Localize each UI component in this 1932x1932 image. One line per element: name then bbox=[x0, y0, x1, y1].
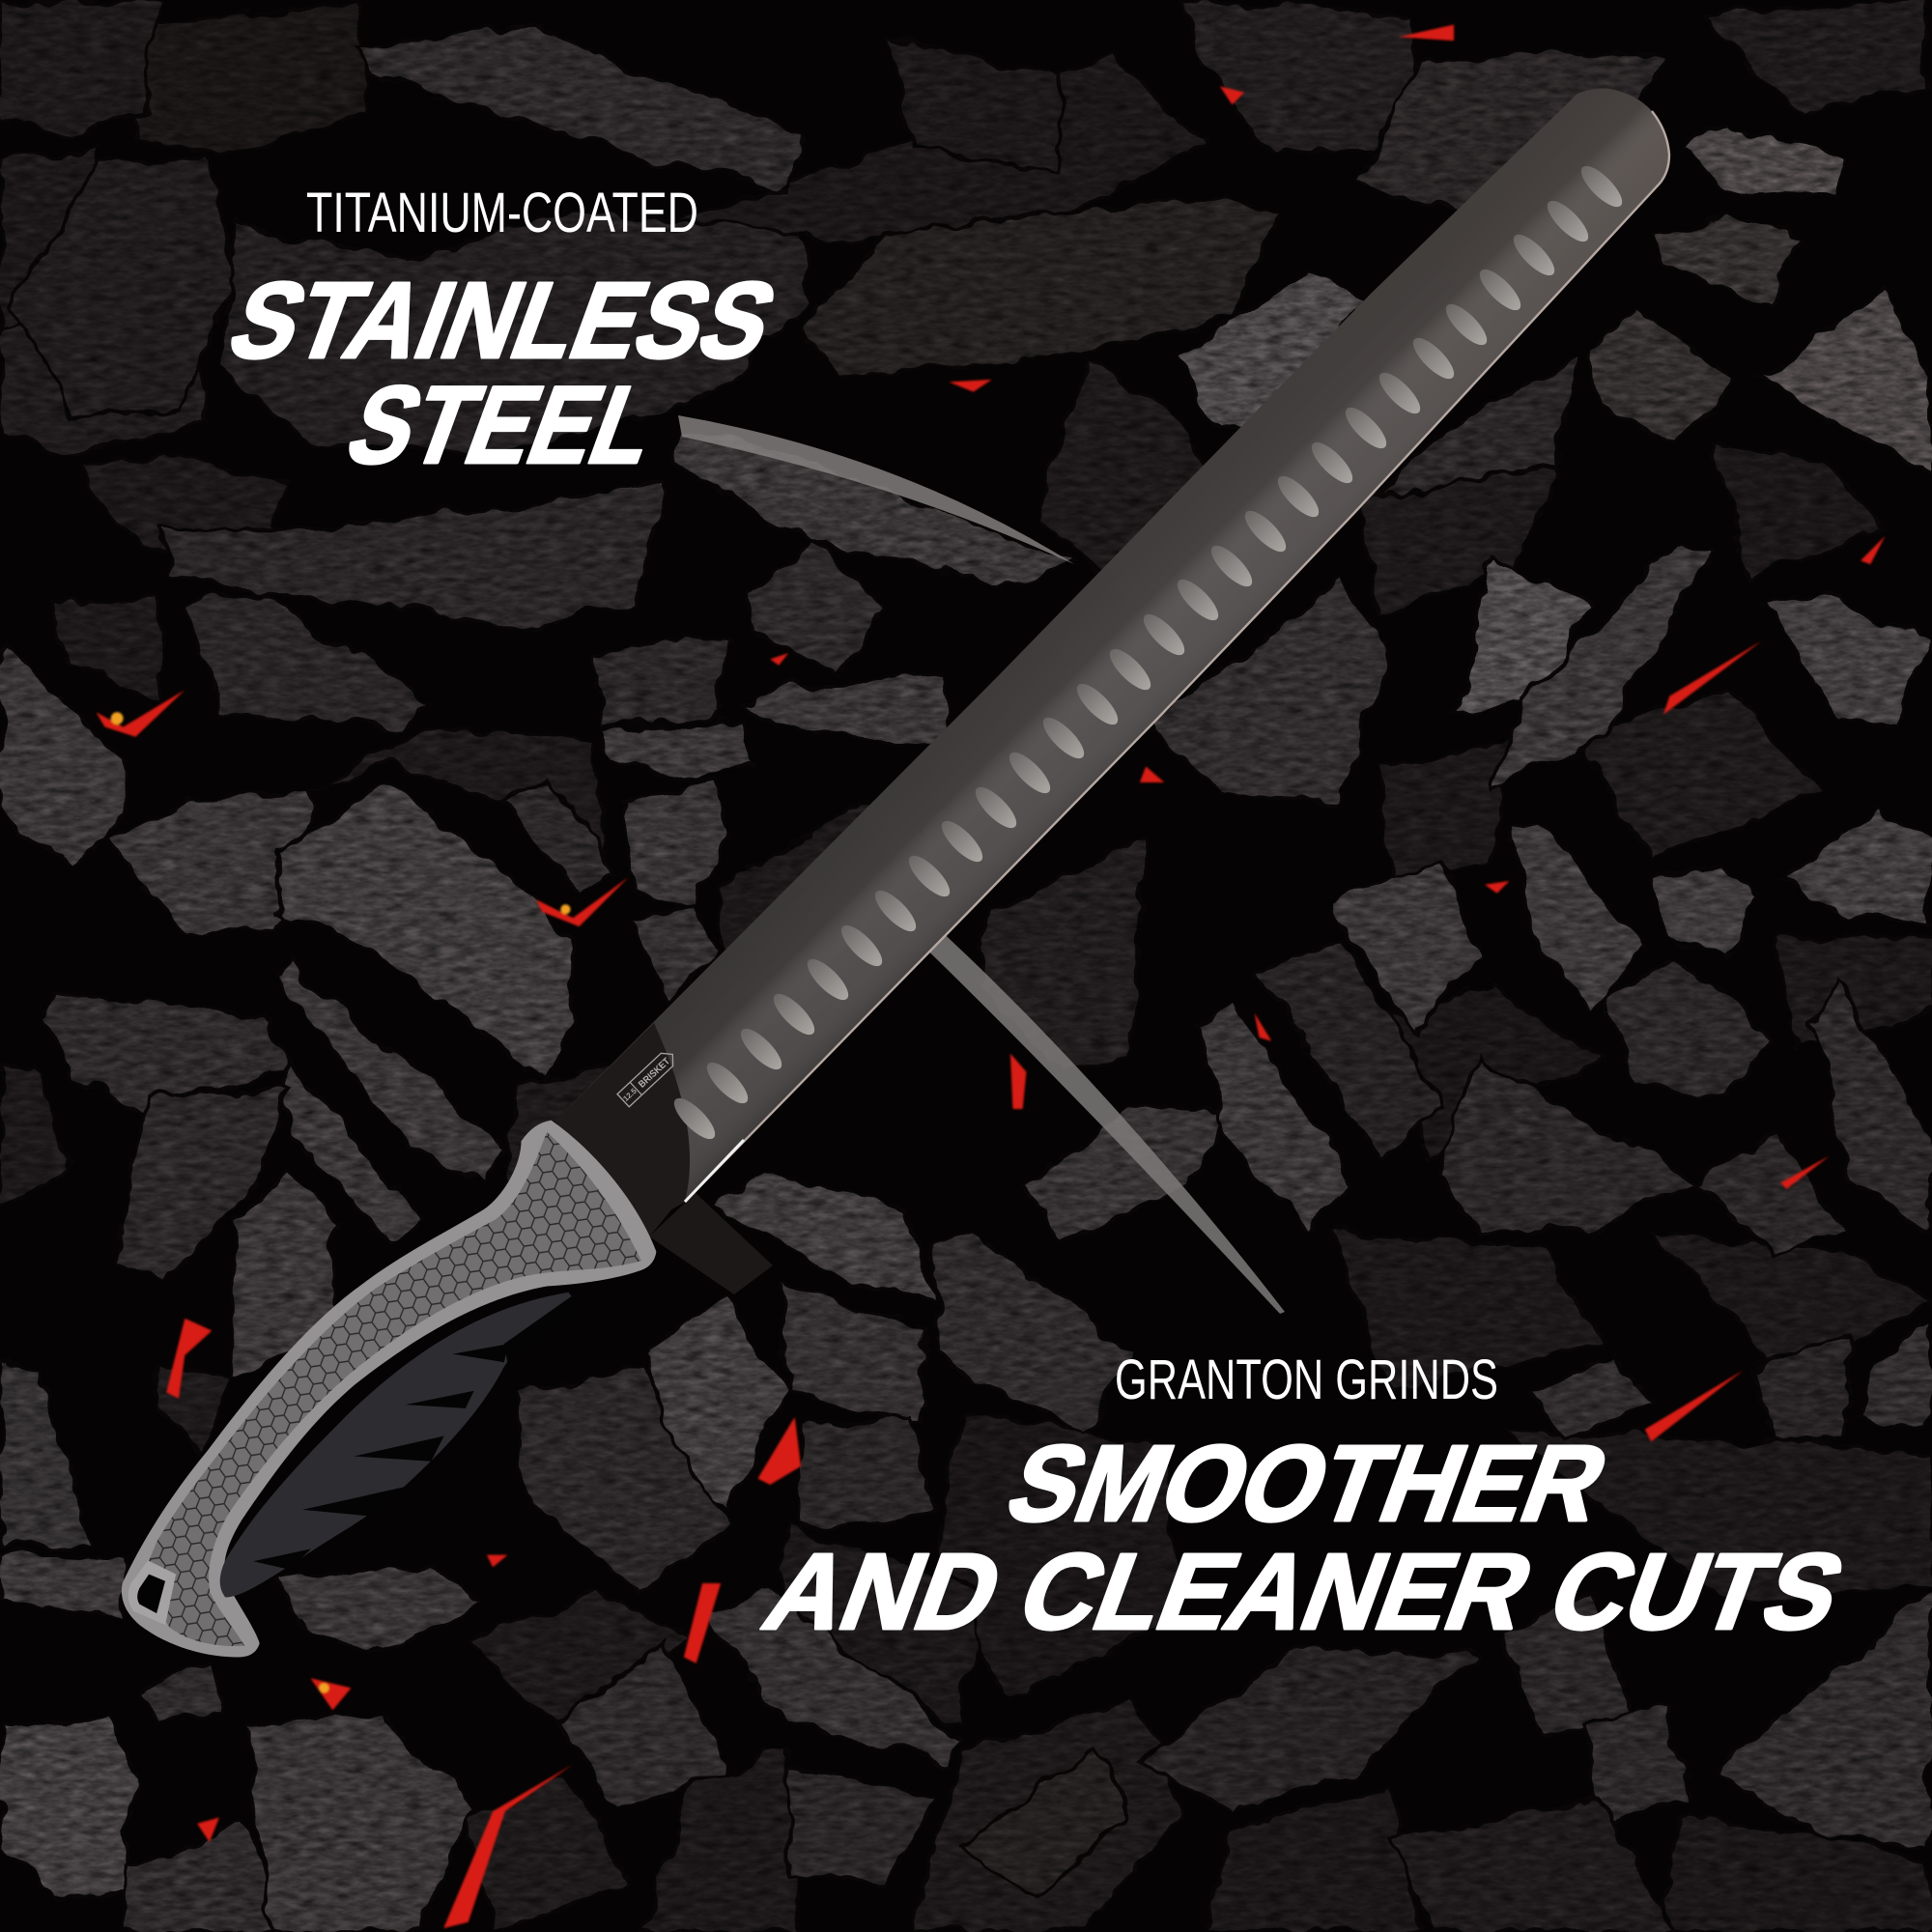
headline: smoother and cleaner cuts: SMOOTHER bbox=[992, 1422, 1624, 1544]
reflection streak: lower bbox=[910, 910, 1285, 1314]
label: titanium-coated: TITANIUM-COATED bbox=[306, 182, 698, 244]
knife blade with granton ovals bbox=[555, 89, 1669, 1236]
headline: smoother and cleaner cuts: AND CLEANER CUTS bbox=[750, 1530, 1861, 1652]
headline: smoother and cleaner cuts bbox=[750, 1422, 1861, 1652]
handle honeycomb texture band bbox=[139, 1132, 641, 1646]
handle body bbox=[122, 1121, 656, 1658]
headline: stainless steel bbox=[214, 259, 792, 486]
blade shading bands bbox=[555, 89, 1669, 1236]
blade logo: brisket badge: 12.5 bbox=[621, 1086, 639, 1103]
handle dark rubber grip bbox=[220, 1293, 573, 1597]
blade edge highlight bbox=[685, 111, 1669, 1202]
reflection streak: upper bbox=[678, 415, 1074, 564]
shadow under knife collar bbox=[649, 1193, 773, 1294]
dark ricasso at blade base bbox=[555, 1023, 690, 1236]
label: granton grinds: GRANTON GRINDS bbox=[1115, 1349, 1498, 1411]
granton ovals bbox=[668, 160, 1628, 1145]
lanyard hole bbox=[128, 1560, 176, 1625]
knife handle bbox=[122, 1121, 656, 1658]
blade logo: brisket badge bbox=[617, 1048, 678, 1107]
headline: stainless steel: STAINLESS bbox=[214, 259, 792, 381]
headline: stainless steel: STEEL bbox=[332, 362, 676, 486]
blade logo: brisket badge: BRISKET bbox=[637, 1056, 672, 1091]
grip jagged shadow notches bbox=[253, 1295, 577, 1570]
